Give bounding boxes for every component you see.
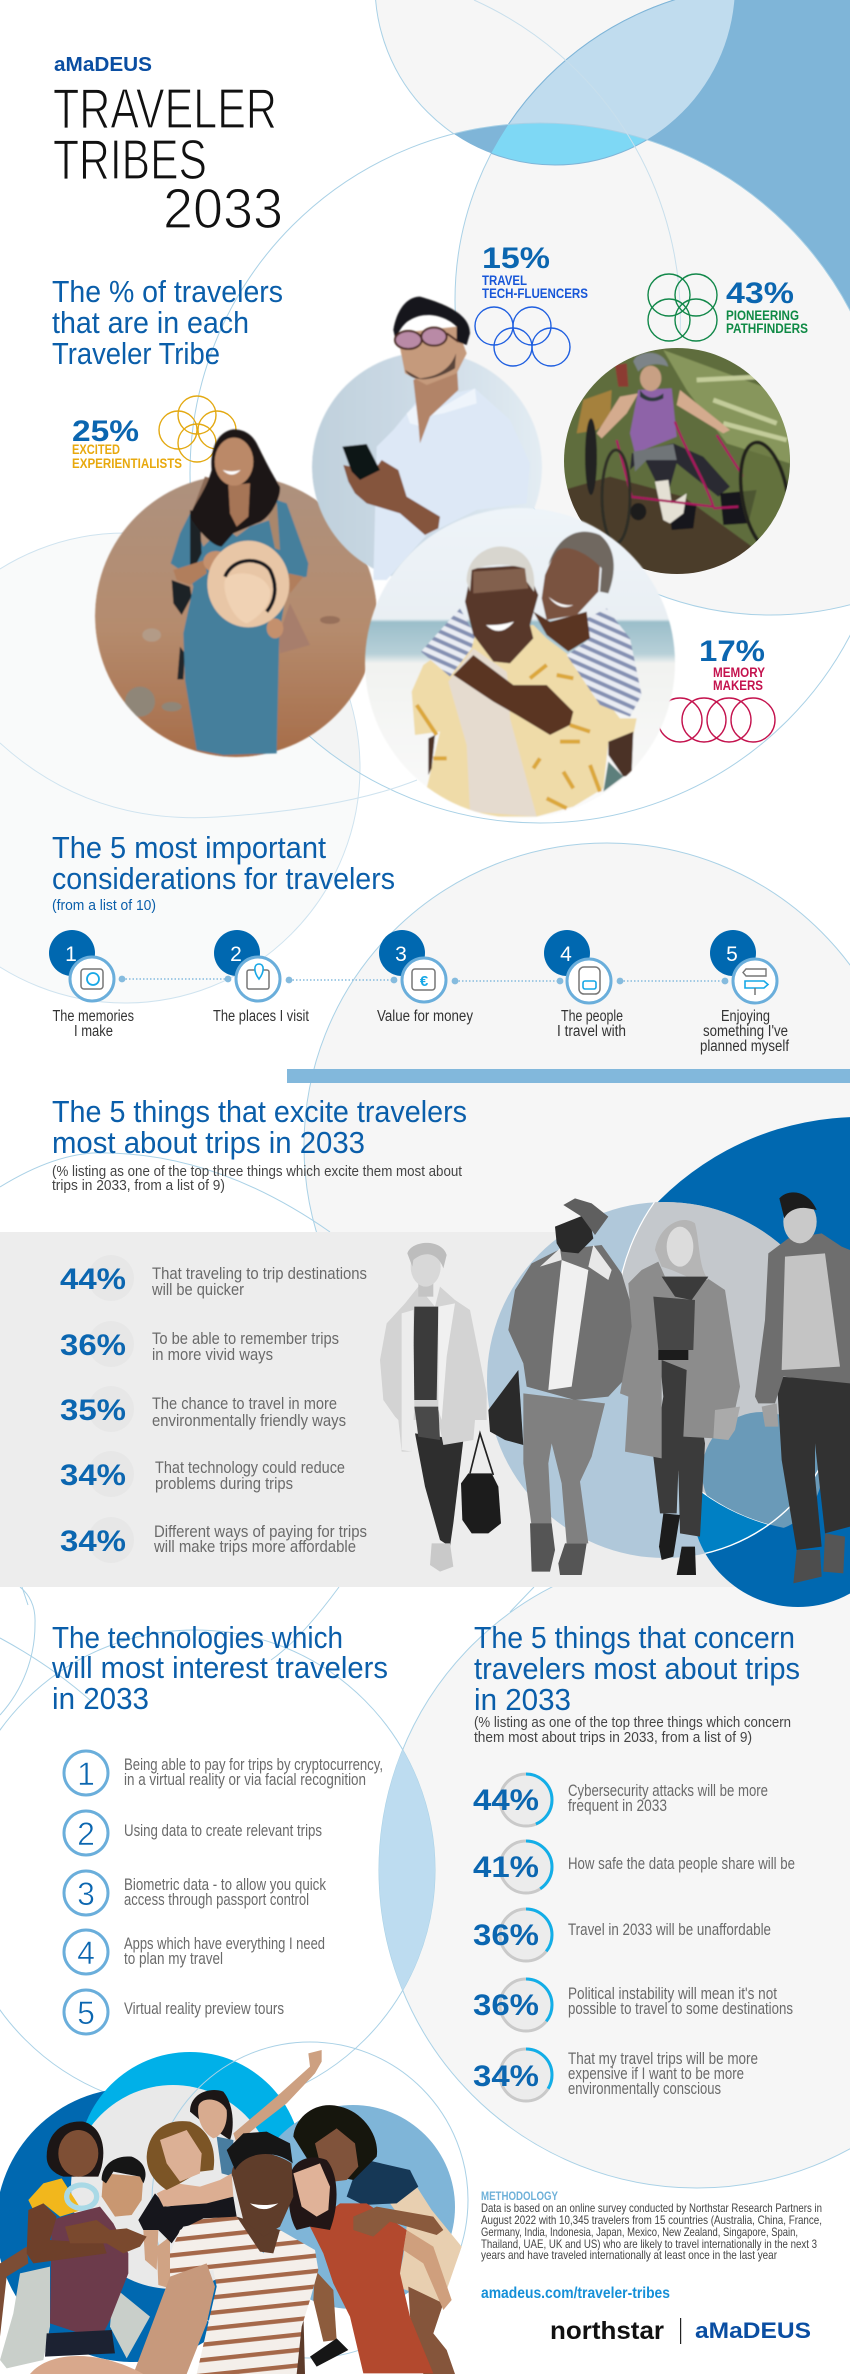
concern 36% instability: Political instability will mean it's not — [568, 1985, 777, 2003]
person: left woman in yellow — [0, 2121, 150, 2368]
tribe: memory makers: MEMORY — [713, 665, 765, 680]
concern 36% instability: 36% — [473, 1989, 539, 2022]
item 5: planning: Enjoying — [721, 1008, 770, 1025]
icon: blue rings — [475, 307, 570, 366]
heading: technologies: in 2033 — [52, 1682, 149, 1716]
heading: excite: trips in 2033, from a list of 9) — [52, 1178, 225, 1194]
photo: group selfie — [0, 2050, 462, 2374]
concern 34%: That my travel trips will be more — [568, 2050, 758, 2068]
stat 36% — [60, 1321, 339, 1367]
item 1: memories: 1 — [65, 943, 77, 966]
item 2: places: 2 — [230, 943, 242, 966]
photo: man with phone — [312, 297, 542, 582]
person: raised arm woman — [190, 2050, 322, 2177]
tribe: excited experientialists — [72, 396, 236, 471]
concern 34%: 34% — [473, 2060, 539, 2093]
heading: concerns: in 2033 — [474, 1683, 571, 1717]
tech item 2: 2 — [77, 1816, 95, 1852]
background circles: lower sections — [0, 1552, 850, 2188]
link: amadeus.com/traveler-tribes — [481, 2285, 670, 2302]
figure: man with beanie — [488, 1198, 637, 1575]
divider bar — [287, 1069, 850, 1083]
stat 35%: environmentally friendly ways — [152, 1412, 346, 1430]
item 4: people: The people — [561, 1008, 623, 1025]
tribe: pioneering pathfinders — [648, 274, 808, 341]
background circles: middle sections — [0, 843, 850, 1660]
concern 44%: 44% — [473, 1784, 539, 1817]
considerations list — [49, 930, 790, 1055]
person: curly-haired man in black — [138, 2121, 237, 2288]
heading: excite: (% listing as one of the top three things which excite them most about — [52, 1164, 462, 1180]
item 1: memories — [49, 930, 134, 1040]
concern 36% instability: possible to travel to some destinations — [568, 2000, 793, 2018]
heading: excite: The 5 things that excite travelers — [52, 1095, 467, 1129]
photo: woman with hat — [95, 429, 377, 757]
title: TRIBES — [53, 128, 207, 192]
concern 44%: frequent in 2033 — [568, 1797, 667, 1815]
figure: woman with coat — [380, 1243, 501, 1572]
logos: northstar and amadeus: aMaDEUS — [695, 2318, 811, 2343]
tech item 3: Biometric data - to allow you quick — [124, 1876, 327, 1894]
tech item 1: 1 — [77, 1756, 95, 1792]
photo: four people walking — [380, 1192, 850, 1583]
figure: blonde woman — [620, 1220, 740, 1575]
stat 44% — [60, 1255, 367, 1301]
logos: northstar and amadeus — [550, 2317, 811, 2345]
stat 44%: 44% — [60, 1263, 126, 1296]
tribe: travel tech-fluencers: TRAVEL — [482, 273, 527, 288]
icon: crimson rings — [658, 698, 775, 742]
stat 36%: To be able to remember trips — [152, 1330, 339, 1348]
tech item 1: in a virtual reality or via facial recognition — [124, 1771, 366, 1789]
tech item 1: Being able to pay for trips by cryptocurrency, — [124, 1756, 383, 1774]
figure: man with cardigan — [755, 1192, 850, 1583]
methodology: years and have traveled internationally at least once in the last year — [481, 2248, 777, 2262]
person: afro woman in navy — [293, 2105, 462, 2374]
item 5: planning — [700, 930, 790, 1055]
tech item 5: 5 — [77, 1995, 95, 2031]
grey band panel — [0, 1232, 850, 1587]
stat 35% — [60, 1386, 346, 1432]
stat 34% technology: That technology could reduce — [155, 1459, 345, 1477]
photo: woman on hand cycle — [560, 347, 797, 577]
background circles: hero — [0, 0, 850, 1003]
connector dots — [119, 976, 728, 984]
tech item 2 — [64, 1811, 322, 1855]
person: central man in striped shirt — [30, 2132, 318, 2374]
tribe: memory makers: MAKERS — [713, 678, 763, 693]
tech item 2: Using data to create relevant trips — [124, 1822, 322, 1840]
heading: excite — [52, 1095, 467, 1194]
concern 41%: 41% — [473, 1851, 539, 1884]
logo: amadeus header: aMaDEUS — [54, 54, 152, 76]
concern 44% — [473, 1774, 768, 1826]
tech item 4: 4 — [77, 1935, 95, 1971]
heading: considerations: (from a list of 10) — [52, 898, 156, 914]
tech item 3: 3 — [77, 1876, 95, 1912]
heading: percent of travelers: Traveler Tribe — [52, 337, 220, 371]
heading: excite: most about trips in 2033 — [52, 1126, 365, 1160]
tech item 3: access through passport control — [124, 1891, 309, 1909]
item 3: value: Value for money — [377, 1008, 473, 1025]
stat 35%: 35% — [60, 1394, 126, 1427]
title: TRAVELER — [53, 77, 277, 141]
heading: concerns: (% listing as one of the top three things which concern — [474, 1715, 791, 1731]
tech item 5: Virtual reality preview tours — [124, 2000, 284, 2018]
stat 34% paying: 34% — [60, 1525, 126, 1558]
item 5: planning: 5 — [726, 943, 738, 966]
methodology — [481, 2189, 822, 2262]
person: woman in red dress — [289, 2157, 452, 2373]
icon: green rings — [648, 274, 717, 341]
stat 34% paying — [60, 1517, 367, 1563]
tribe: excited experientialists: EXCITED — [72, 442, 120, 457]
item 5: planning: planned myself — [700, 1038, 790, 1055]
heading: concerns: travelers most about trips — [474, 1652, 800, 1686]
tech item 4 — [64, 1930, 325, 1974]
heading: percent of travelers: The % of travelers — [52, 275, 283, 309]
background circles: band artwork — [487, 1117, 850, 1607]
concern 44%: Cybersecurity attacks will be more — [568, 1782, 768, 1800]
stat 34% paying: Different ways of paying for trips — [154, 1523, 367, 1541]
item 4: people: I travel with — [557, 1023, 626, 1040]
heading: considerations: considerations for travelers — [52, 862, 395, 896]
stat 34% technology: problems during trips — [155, 1475, 293, 1493]
heading: technologies: The technologies which — [52, 1621, 343, 1655]
item 1: memories: The memories — [52, 1008, 134, 1025]
technologies list — [64, 1751, 383, 2034]
icon: yellow rings — [159, 396, 236, 462]
tribe: pioneering pathfinders: PATHFINDERS — [726, 321, 808, 336]
concern 36% affordability: Travel in 2033 will be unaffordable — [568, 1921, 771, 1939]
tribe: excited experientialists: 25% — [72, 415, 139, 448]
item 4: people — [544, 930, 626, 1040]
item 2: places: The places I visit — [213, 1008, 310, 1025]
tech item 3 — [64, 1871, 327, 1915]
item 3: value — [377, 930, 473, 1025]
stat 44%: will be quicker — [151, 1281, 244, 1299]
tech item 5 — [64, 1990, 284, 2034]
concern 34%: expensive if I want to be more — [568, 2065, 744, 2083]
excitement stats list — [60, 1255, 367, 1563]
concerns list — [473, 1774, 795, 2101]
concern 34%: environmentally conscious — [568, 2080, 721, 2098]
concern 36% instability — [473, 1979, 793, 2031]
heading: percent of travelers: that are in each — [52, 306, 249, 340]
tech item 1 — [64, 1751, 383, 1795]
tribe: travel tech-fluencers: TECH-FLUENCERS — [482, 286, 588, 301]
concern 36% affordability — [473, 1909, 771, 1961]
tribe: pioneering pathfinders: PIONEERING — [726, 308, 799, 323]
tribe: memory makers: 17% — [699, 635, 765, 668]
photo: laughing couple — [360, 505, 680, 822]
heading: concerns: them most about trips in 2033, from a list of 9) — [474, 1730, 752, 1746]
stat 36%: 36% — [60, 1329, 126, 1362]
stat 35%: The chance to travel in more — [152, 1395, 337, 1413]
tribe: travel tech-fluencers: 15% — [482, 242, 550, 275]
concern 41%: How safe the data people share will be — [568, 1855, 795, 1873]
stat 34% technology: 34% — [60, 1459, 126, 1492]
tech item 4: Apps which have everything I need — [124, 1935, 325, 1953]
stat 34% technology — [60, 1451, 345, 1497]
item 1: memories: I make — [74, 1023, 113, 1040]
stat 36%: in more vivid ways — [152, 1346, 273, 1364]
tribe: memory makers — [658, 635, 775, 742]
heading: technologies: will most interest travelers — [51, 1651, 388, 1685]
heading: considerations: The 5 most important — [52, 831, 326, 865]
concern 34% — [473, 2049, 758, 2101]
item 4: people: 4 — [560, 943, 572, 966]
item 5: planning: something I've — [703, 1023, 788, 1040]
item 3: value: € — [420, 973, 429, 990]
title — [53, 77, 283, 241]
tribe: excited experientialists: EXPERIENTIALISTS — [72, 456, 182, 471]
stat 44%: That traveling to trip destinations — [152, 1265, 367, 1283]
title: 2033 — [163, 177, 283, 241]
concern 36% affordability: 36% — [473, 1919, 539, 1952]
logos: northstar and amadeus: northstar — [550, 2317, 664, 2345]
tech item 4: to plan my travel — [124, 1950, 223, 1968]
person: man in maroon — [27, 2156, 147, 2357]
concern 41% — [473, 1841, 795, 1893]
heading: percent of travelers — [52, 275, 283, 371]
tribe: travel tech-fluencers — [475, 242, 588, 366]
item 2: places — [213, 930, 310, 1025]
item 3: value: 3 — [395, 943, 407, 966]
background circles: group photo — [0, 2042, 468, 2362]
tribe: pioneering pathfinders: 43% — [726, 277, 794, 310]
heading: concerns: The 5 things that concern — [474, 1621, 795, 1655]
methodology: METHODOLOGY — [481, 2189, 558, 2203]
heading: considerations — [52, 831, 395, 914]
heading: concerns — [474, 1621, 800, 1746]
stat 34% paying: will make trips more affordable — [153, 1538, 356, 1556]
heading: technologies — [51, 1621, 388, 1716]
